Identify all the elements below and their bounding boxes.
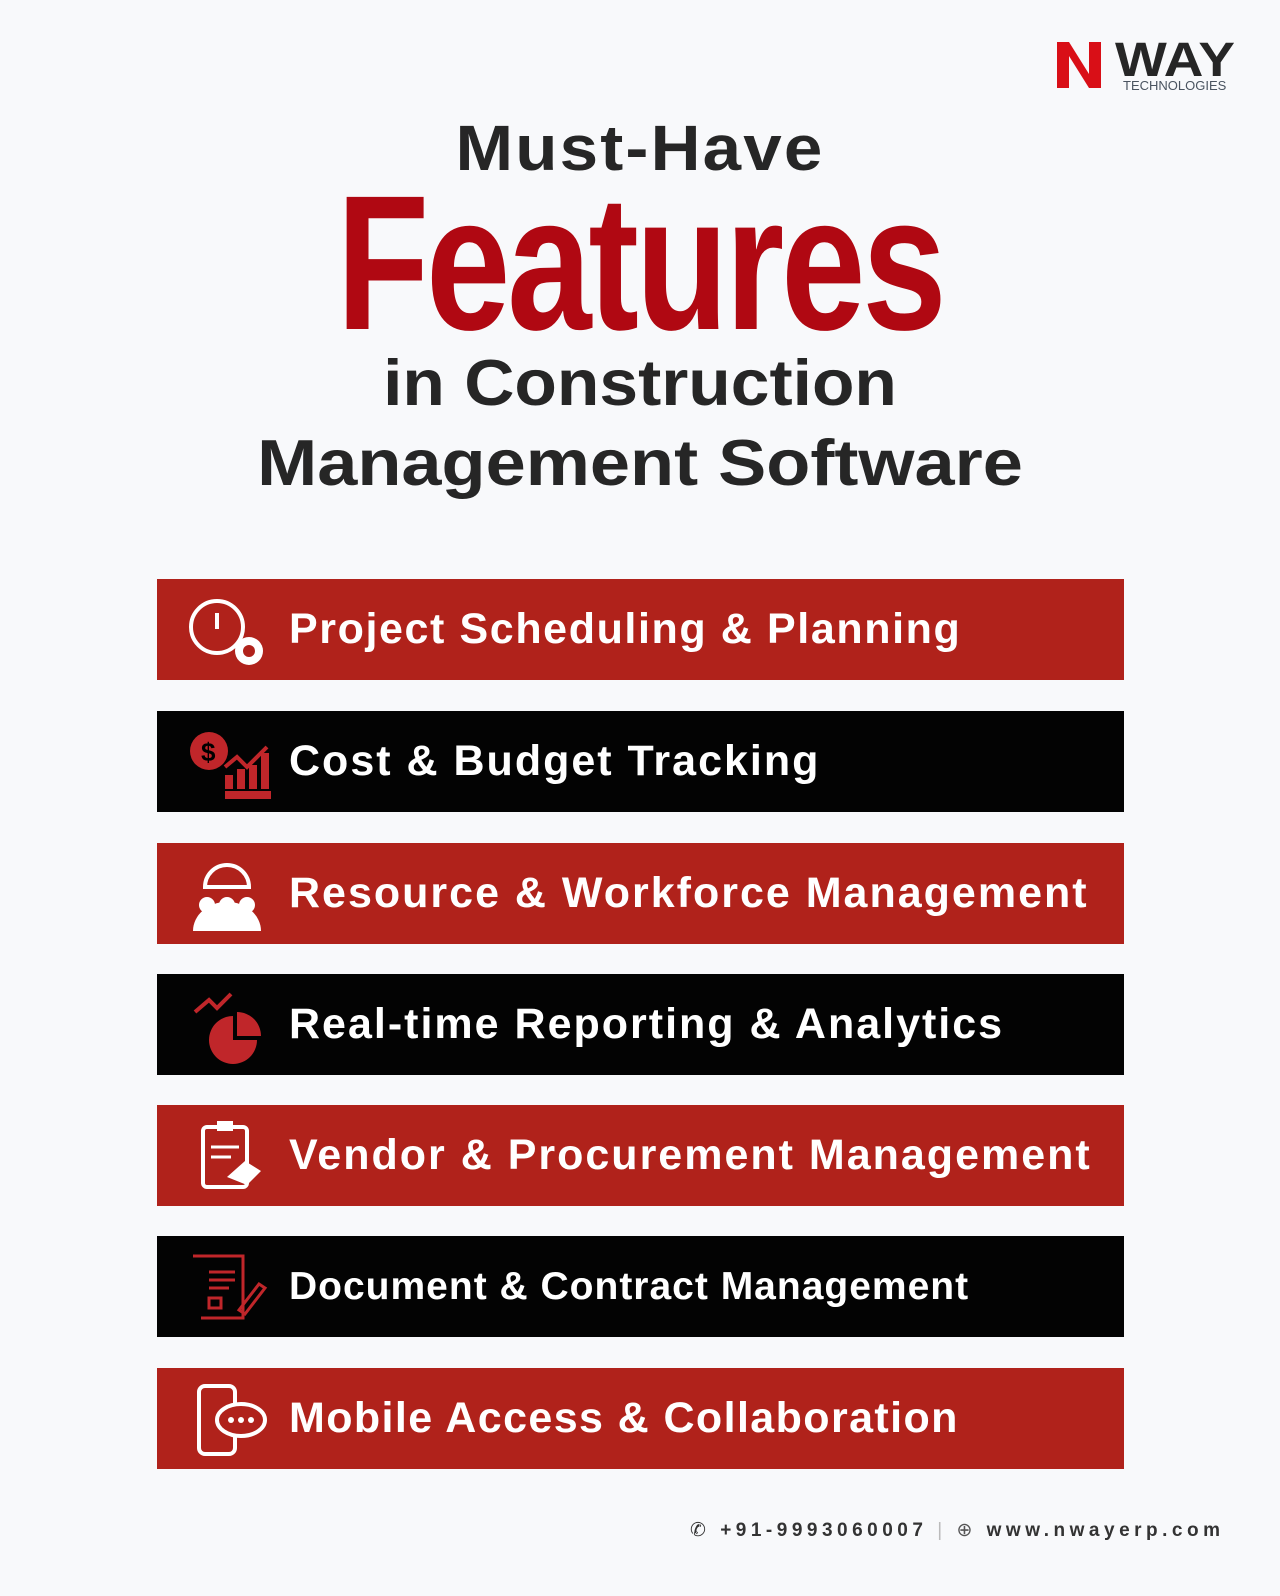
bar 4 [157, 974, 1124, 1075]
logo [1057, 36, 1235, 93]
bar 6: Document & Contract Management [289, 1265, 969, 1308]
icon: clipboard handshake [201, 1121, 261, 1189]
logo: TECHNOLOGIES [1123, 78, 1227, 93]
bar 2: Cost & Budget Tracking [289, 737, 820, 785]
bar 6 [157, 1236, 1124, 1337]
bar 1: Project Scheduling & Planning [289, 605, 961, 653]
icon: clock gear [189, 599, 263, 665]
bar 5: Vendor & Procurement Management [289, 1131, 1092, 1179]
title: in Construction [383, 346, 897, 419]
bar 7: Mobile Access & Collaboration [289, 1394, 959, 1442]
title [257, 112, 1023, 499]
title: Features [337, 155, 943, 370]
bar 5 [157, 1105, 1124, 1206]
icon: mobile chat [197, 1384, 267, 1456]
icon: contract [193, 1254, 268, 1320]
icon: workforce [193, 863, 261, 931]
bar 2 [157, 711, 1124, 812]
bar 7 [157, 1368, 1124, 1469]
bar 3: Resource & Workforce Management [289, 869, 1089, 917]
bar 4: Real-time Reporting & Analytics [289, 1000, 1004, 1048]
icon: pie chart [194, 992, 261, 1064]
footer contact: ✆ +91-9993060007 | ⊕ www.nwayerp.com [690, 1520, 1224, 1541]
bar 3 [157, 843, 1124, 944]
bar 1 [157, 579, 1124, 680]
title: Management Software [257, 426, 1023, 499]
icon: cost chart: $ [201, 737, 216, 767]
title: Must-Have [456, 112, 824, 184]
icon: cost chart [190, 732, 271, 799]
